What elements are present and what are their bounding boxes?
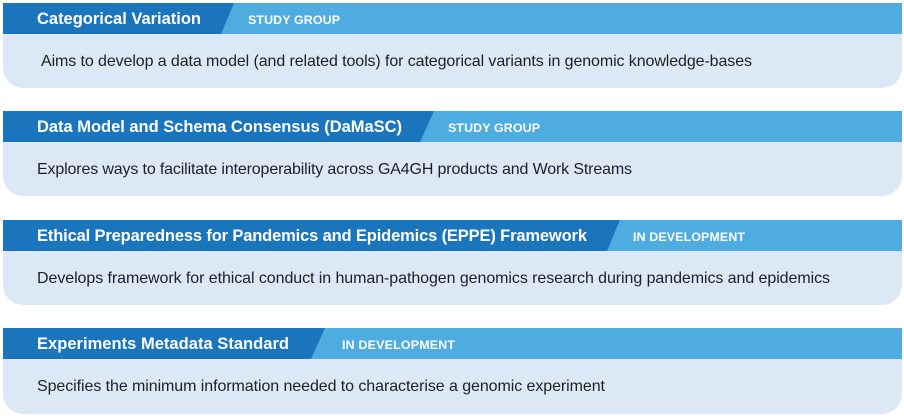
heading: Experiments Metadata Standard: Experiments Metadata Standard [37, 335, 289, 353]
panel: Categorical Variation [3, 3, 902, 88]
status tag: in development: IN DEVELOPMENT [633, 230, 745, 244]
heading: Categorical Variation: Categorical Variation [37, 10, 201, 28]
description: Categorical Variation: Aims to develop a data model (and related tools) for categorical variants in genomic knowledge-bases [41, 53, 752, 70]
description: Experiments Metadata Standard: Specifies the minimum information needed to characterise a genomic experiment [37, 378, 606, 395]
description: EPPE Framework: Develops framework for ethical conduct in human-pathogen genomics research during pandemics and epidemics [37, 270, 830, 287]
heading: EPPE Framework: Ethical Preparedness for Pandemics and Epidemics (EPPE) Framework [37, 227, 588, 245]
panel: DaMaSC [3, 111, 902, 196]
status tag: study group: STUDY GROUP [448, 121, 540, 135]
status tag: in development: IN DEVELOPMENT [342, 338, 455, 352]
heading: DaMaSC: Data Model and Schema Consensus (DaMaSC) [37, 118, 402, 136]
panel: EPPE Framework [3, 220, 902, 305]
panel: Experiments Metadata Standard [3, 328, 902, 414]
status tag: study group: STUDY GROUP [248, 13, 340, 27]
description: DaMaSC: Explores ways to facilitate interoperability across GA4GH products and Work Streams [37, 161, 632, 178]
